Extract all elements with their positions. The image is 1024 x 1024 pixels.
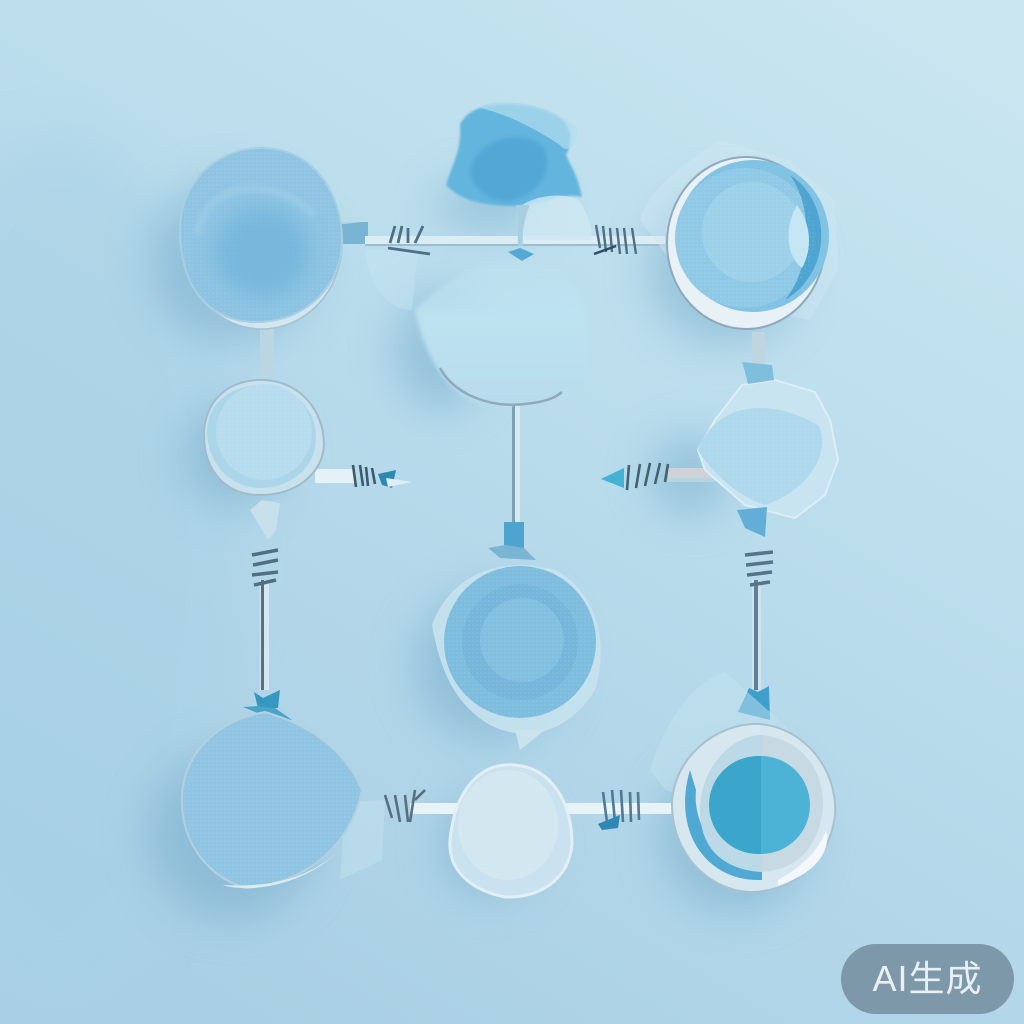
connector lines [260, 222, 765, 814]
node: top left circle [180, 148, 364, 329]
node: middle left circle [204, 380, 324, 495]
arrow: top row right fletching [594, 225, 636, 254]
node: top right circle [640, 140, 838, 329]
node: middle right torn shape [698, 362, 838, 537]
node: bottom centre circle [450, 765, 572, 897]
node: bottom right target circle [650, 672, 835, 892]
arrow: middle right pointing left [601, 463, 668, 490]
arrow: left column [243, 500, 292, 720]
arrow: top row left fletching [388, 226, 430, 254]
arrow: bottom right connector [598, 790, 639, 830]
node: top centre torn shape [446, 103, 592, 261]
soft shadows [148, 180, 811, 919]
arrow: centre line down [488, 522, 536, 560]
badge: AI generated: AI生成 [872, 958, 982, 999]
badge: AI generated [841, 944, 1014, 1014]
node: bottom left circle [182, 712, 385, 888]
node: large centre pale shape [365, 250, 590, 406]
node: centre circle [432, 565, 601, 750]
arrow: right column [738, 552, 773, 720]
arrow: bottom left connector [385, 790, 425, 822]
arrow: middle left pointing right [353, 465, 412, 488]
